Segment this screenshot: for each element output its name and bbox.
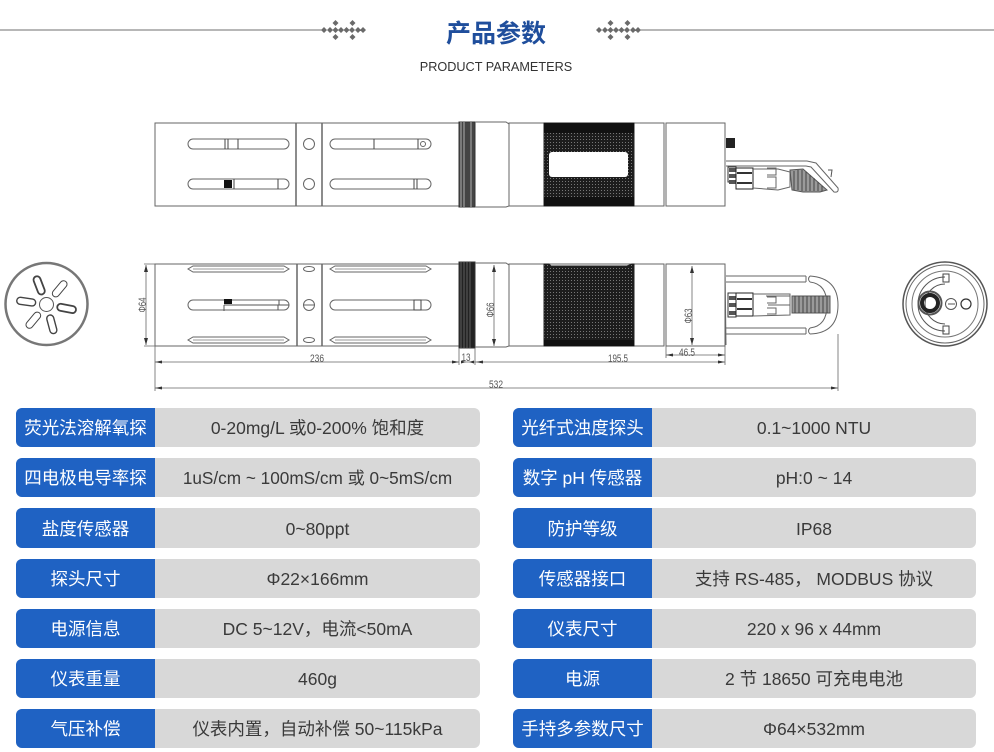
row: pressure compensation: 气压补偿 <box>50 719 120 739</box>
black band <box>459 122 475 207</box>
row: probe size: Φ22×166mm <box>266 569 368 589</box>
title: 产品参数 <box>446 20 546 48</box>
row: conductivity <box>16 458 480 497</box>
header ornament lines <box>0 20 994 40</box>
row: salinity <box>16 508 480 548</box>
row: power info <box>16 609 480 648</box>
row: protection: 防护等级 <box>548 519 618 539</box>
row: power: 2 节 18650 可充电电池 <box>725 669 903 689</box>
row: power info: 电源信息 <box>50 619 120 639</box>
parameter table: right column <box>513 408 976 748</box>
cable loop <box>726 276 806 334</box>
row: meter weight <box>16 659 480 698</box>
row: conductivity: 1uS/cm ~ 100mS/cm 或 0~5mS/cm <box>183 468 452 488</box>
dimension labels: Φ66 <box>485 302 497 318</box>
row: handheld size: 手持多参数尺寸 <box>521 719 644 739</box>
technical drawing <box>4 122 988 391</box>
guard tube <box>155 123 460 206</box>
row: sensor interface <box>513 559 976 598</box>
row: power: 电源 <box>565 669 600 689</box>
dimension labels: Φ64 <box>137 298 149 312</box>
row: handheld size: Φ64×532mm <box>763 719 865 739</box>
row: dissolved oxygen <box>16 408 480 447</box>
row: power <box>513 659 976 698</box>
guard tube <box>155 264 459 346</box>
dimension labels: 46.5 <box>679 347 695 359</box>
row: handheld size <box>513 709 976 748</box>
row: pressure compensation <box>16 709 480 748</box>
dimension labels: 13 <box>462 352 470 364</box>
connector <box>728 293 736 317</box>
knurled grip <box>544 123 634 206</box>
dimension labels: 195.5 <box>608 353 628 365</box>
row: sensor interface: 传感器接口 <box>539 569 626 589</box>
row: turbidity: 0.1~1000 NTU <box>757 418 871 438</box>
body <box>475 263 509 347</box>
head <box>666 264 725 346</box>
row: turbidity: 光纤式浊度探头 <box>521 418 644 438</box>
row: meter weight: 仪表重量 <box>50 669 120 689</box>
row: meter size <box>513 609 976 648</box>
head <box>666 123 725 206</box>
row: probe size <box>16 559 480 598</box>
dimension labels: 236 <box>310 353 324 365</box>
top view: probe <box>155 122 838 207</box>
row: meter size: 仪表尺寸 <box>548 619 618 639</box>
connector <box>726 161 838 192</box>
subtitle: PRODUCT PARAMETERS <box>420 60 572 74</box>
dimension labels: Φ63 <box>683 308 695 324</box>
row: turbidity <box>513 408 976 447</box>
row: meter weight: 460g <box>298 669 337 689</box>
body <box>475 122 509 207</box>
row: salinity: 0~80ppt <box>286 519 349 539</box>
row: pressure compensation: 仪表内置，自动补偿 50~115kPa <box>192 719 443 739</box>
parameter table: left column <box>16 408 480 748</box>
left end view <box>6 263 88 345</box>
dimension labels: 532 <box>489 379 503 391</box>
row: protection <box>513 508 976 548</box>
row: protection: IP68 <box>796 519 832 539</box>
black band <box>459 262 475 348</box>
row: meter size: 220 x 96 x 44mm <box>747 619 881 639</box>
row: power info: DC 5~12V，电流<50mA <box>223 619 412 639</box>
row: sensor interface: 支持 RS-485， MODBUS 协议 <box>695 569 933 589</box>
row: probe size: 探头尺寸 <box>50 569 120 589</box>
knurled grip <box>544 264 634 346</box>
row: pH <box>513 458 976 497</box>
dimension labels <box>137 298 695 391</box>
row: pH: pH:0 ~ 14 <box>776 468 852 488</box>
row: pH: 数字 pH 传感器 <box>523 468 642 488</box>
dimension lines <box>144 264 838 391</box>
row: dissolved oxygen: 荧光法溶解氧探 <box>24 418 147 438</box>
right end view <box>903 262 987 346</box>
row: salinity: 盐度传感器 <box>42 519 129 539</box>
row: conductivity: 四电极电导率探 <box>24 468 147 488</box>
row: dissolved oxygen: 0-20mg/L 或0-200% 饱和度 <box>211 418 424 438</box>
bottom view: probe <box>155 262 838 348</box>
